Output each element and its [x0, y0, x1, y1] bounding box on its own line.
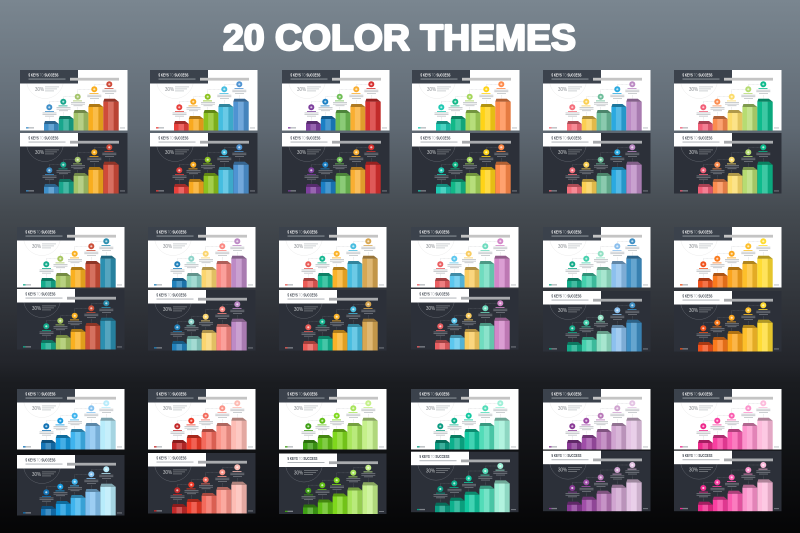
panel: theme 13 light: 5 KEYS TO SUCCESS	[26, 392, 56, 396]
panel: theme 9 light: 5 KEYS TO SUCCESS	[288, 230, 318, 234]
panel: theme 10 dark: 30%	[426, 306, 435, 312]
theme 3	[282, 62, 390, 194]
panel: theme 10 light: 5 KEYS TO SUCCESS	[420, 230, 450, 234]
panel: theme 16 light: 30%	[426, 406, 435, 412]
panel: theme 10 dark: 5 KEYS TO SUCCESS	[420, 292, 450, 296]
panel: theme 7 light	[17, 218, 124, 288]
theme 15	[279, 380, 386, 514]
panel: theme 13 light: 30%	[32, 406, 41, 412]
panel: theme 9 light	[279, 218, 386, 288]
panel: theme 13 dark: 5 KEYS TO SUCCESS	[26, 458, 56, 462]
panel: theme 15 dark	[279, 445, 386, 514]
panel: theme 17 dark: 30%	[558, 468, 567, 474]
panel: theme 5 dark: 5 KEYS TO SUCCESS	[552, 136, 582, 140]
panel: theme 13 dark: 30%	[32, 472, 41, 478]
theme 2	[150, 62, 258, 194]
panel: theme 12 dark: 5 KEYS TO SUCCESS	[682, 294, 713, 298]
panel: theme 11 light: 5 KEYS TO SUCCESS	[552, 230, 582, 234]
theme 17	[543, 380, 650, 511]
panel: theme 16 dark	[411, 443, 518, 512]
panel: theme 17 dark: 5 KEYS TO SUCCESS	[552, 453, 582, 458]
panel: theme 3 dark: 5 KEYS TO SUCCESS	[290, 136, 321, 140]
panel: theme 4 dark: 30%	[427, 150, 436, 156]
panel: theme 1 light: 30%	[35, 87, 44, 93]
panel: theme 5 light	[543, 62, 650, 130]
panel: theme 12 light: 30%	[689, 244, 698, 250]
panel: theme 8 light: 5 KEYS TO SUCCESS	[156, 230, 187, 234]
panel: theme 18 light	[674, 380, 782, 450]
panel: theme 18 light: 5 KEYS TO SUCCESS	[682, 392, 713, 396]
panel: theme 13 light	[17, 380, 124, 450]
panel: theme 5 dark: 30%	[558, 150, 567, 156]
panel: theme 7 light: 30%	[32, 244, 41, 250]
panel: theme 2 dark: 5 KEYS TO SUCCESS	[158, 136, 189, 140]
panel: theme 11 light: 30%	[558, 244, 567, 250]
title: 20 COLOR THEMES	[223, 17, 576, 58]
panel: theme 14 light: 30%	[163, 406, 172, 412]
panel: theme 5 light: 5 KEYS TO SUCCESS	[552, 72, 582, 78]
panel: theme 2 dark	[150, 124, 258, 194]
panel: theme 2 light: 30%	[165, 87, 174, 93]
panel: theme 9 dark: 5 KEYS TO SUCCESS	[288, 292, 318, 298]
panel: theme 12 light	[674, 218, 782, 288]
panel: theme 9 dark	[279, 282, 386, 350]
panel: theme 13 dark	[17, 446, 124, 516]
panel: theme 2 light	[150, 62, 258, 130]
panel: theme 6 dark: 5 KEYS TO SUCCESS	[682, 136, 713, 140]
panel: theme 10 dark	[411, 280, 518, 350]
panel: theme 11 dark	[543, 282, 650, 352]
panel: theme 15 light: 5 KEYS TO SUCCESS	[288, 392, 318, 396]
panel: theme 15 light: 30%	[294, 406, 303, 412]
panel: theme 7 dark: 5 KEYS TO SUCCESS	[26, 292, 56, 296]
panel: theme 3 light	[282, 62, 390, 130]
panel: theme 17 light	[543, 380, 650, 450]
panel: theme 14 dark: 5 KEYS TO SUCCESS	[156, 456, 187, 460]
panel: theme 8 light: 30%	[163, 244, 172, 250]
panel: theme 15 dark: 30%	[294, 470, 303, 476]
panel: theme 6 light: 30%	[689, 87, 698, 93]
panel: theme 11 dark: 30%	[558, 308, 567, 314]
theme 16	[411, 380, 518, 512]
panel: theme 12 dark: 30%	[689, 308, 698, 314]
panel: theme 3 dark: 30%	[297, 150, 306, 156]
panel: theme 15 light	[279, 380, 386, 450]
panel: theme 4 dark	[412, 124, 520, 194]
panel: theme 7 dark: 30%	[32, 306, 41, 312]
panel: theme 6 dark: 30%	[689, 150, 698, 156]
panel: theme 18 dark	[674, 442, 782, 511]
panel: theme 1 light	[20, 62, 128, 130]
theme 1	[20, 62, 128, 194]
panel: theme 18 light: 30%	[689, 406, 698, 412]
panel: theme 16 light: 5 KEYS TO SUCCESS	[420, 392, 450, 396]
panel: theme 1 dark: 30%	[35, 150, 44, 156]
panel: theme 12 dark	[674, 282, 782, 352]
panel: theme 9 light: 30%	[294, 244, 303, 250]
theme 18	[674, 380, 782, 511]
theme 11	[543, 218, 650, 352]
panel: theme 18 dark: 30%	[689, 468, 698, 474]
panel: theme 9 dark: 30%	[294, 307, 303, 313]
panel: theme 1 dark: 5 KEYS TO SUCCESS	[28, 136, 59, 140]
panel: theme 8 light	[148, 218, 256, 288]
panel: theme 4 dark: 5 KEYS TO SUCCESS	[420, 136, 451, 140]
panel: theme 8 dark: 30%	[163, 307, 172, 313]
panel: theme 14 light	[148, 380, 256, 450]
panel: theme 17 light: 5 KEYS TO SUCCESS	[552, 392, 582, 396]
theme 14	[148, 380, 256, 514]
panel: theme 14 dark: 30%	[163, 470, 172, 476]
theme 4	[412, 62, 520, 194]
panel: theme 17 dark	[543, 442, 650, 511]
panel: theme 16 light	[411, 380, 518, 450]
panel: theme 7 dark	[17, 280, 124, 350]
theme 6	[674, 62, 782, 194]
panel: theme 17 light: 30%	[558, 406, 567, 412]
theme 12	[674, 218, 782, 352]
panel: theme 18 dark: 5 KEYS TO SUCCESS	[682, 453, 713, 458]
panel: theme 14 dark	[148, 444, 256, 514]
panel: theme 1 dark	[20, 124, 128, 194]
panel: theme 14 light: 5 KEYS TO SUCCESS	[156, 392, 187, 396]
panel: theme 15 dark: 5 KEYS TO SUCCESS	[288, 456, 318, 461]
panel: theme 1 light: 5 KEYS TO SUCCESS	[28, 72, 59, 78]
panel: theme 8 dark: 5 KEYS TO SUCCESS	[156, 292, 187, 298]
panel: theme 10 light	[411, 218, 518, 288]
panel: theme 4 light: 5 KEYS TO SUCCESS	[420, 72, 451, 78]
panel: theme 6 dark	[674, 124, 782, 194]
panel: theme 4 light: 30%	[427, 87, 436, 93]
panel: theme 12 light: 5 KEYS TO SUCCESS	[682, 230, 713, 234]
panel: theme 3 light: 5 KEYS TO SUCCESS	[290, 72, 321, 78]
theme 10	[411, 218, 518, 350]
panel: theme 8 dark	[148, 282, 256, 350]
panel: theme 6 light	[674, 62, 782, 130]
panel: theme 5 dark	[543, 124, 650, 194]
panel: theme 11 dark: 5 KEYS TO SUCCESS	[552, 294, 582, 298]
panel: theme 3 dark	[282, 124, 390, 194]
panel: theme 2 light: 5 KEYS TO SUCCESS	[158, 72, 189, 78]
theme 7	[17, 218, 124, 350]
theme 5	[543, 62, 650, 194]
panel: theme 11 light	[543, 218, 650, 288]
panel: theme 10 light: 30%	[426, 244, 435, 250]
theme 13	[17, 380, 124, 516]
panel: theme 3 light: 30%	[297, 87, 306, 93]
panel: theme 16 dark: 30%	[426, 469, 435, 475]
theme 8	[148, 218, 256, 350]
panel: theme 2 dark: 30%	[165, 150, 174, 156]
panel: theme 7 light: 5 KEYS TO SUCCESS	[26, 230, 56, 234]
panel: theme 5 light: 30%	[558, 87, 567, 93]
panel: theme 16 dark: 5 KEYS TO SUCCESS	[420, 454, 450, 459]
theme 9	[279, 218, 386, 350]
panel: theme 6 light: 5 KEYS TO SUCCESS	[682, 72, 713, 78]
panel: theme 4 light	[412, 62, 520, 130]
